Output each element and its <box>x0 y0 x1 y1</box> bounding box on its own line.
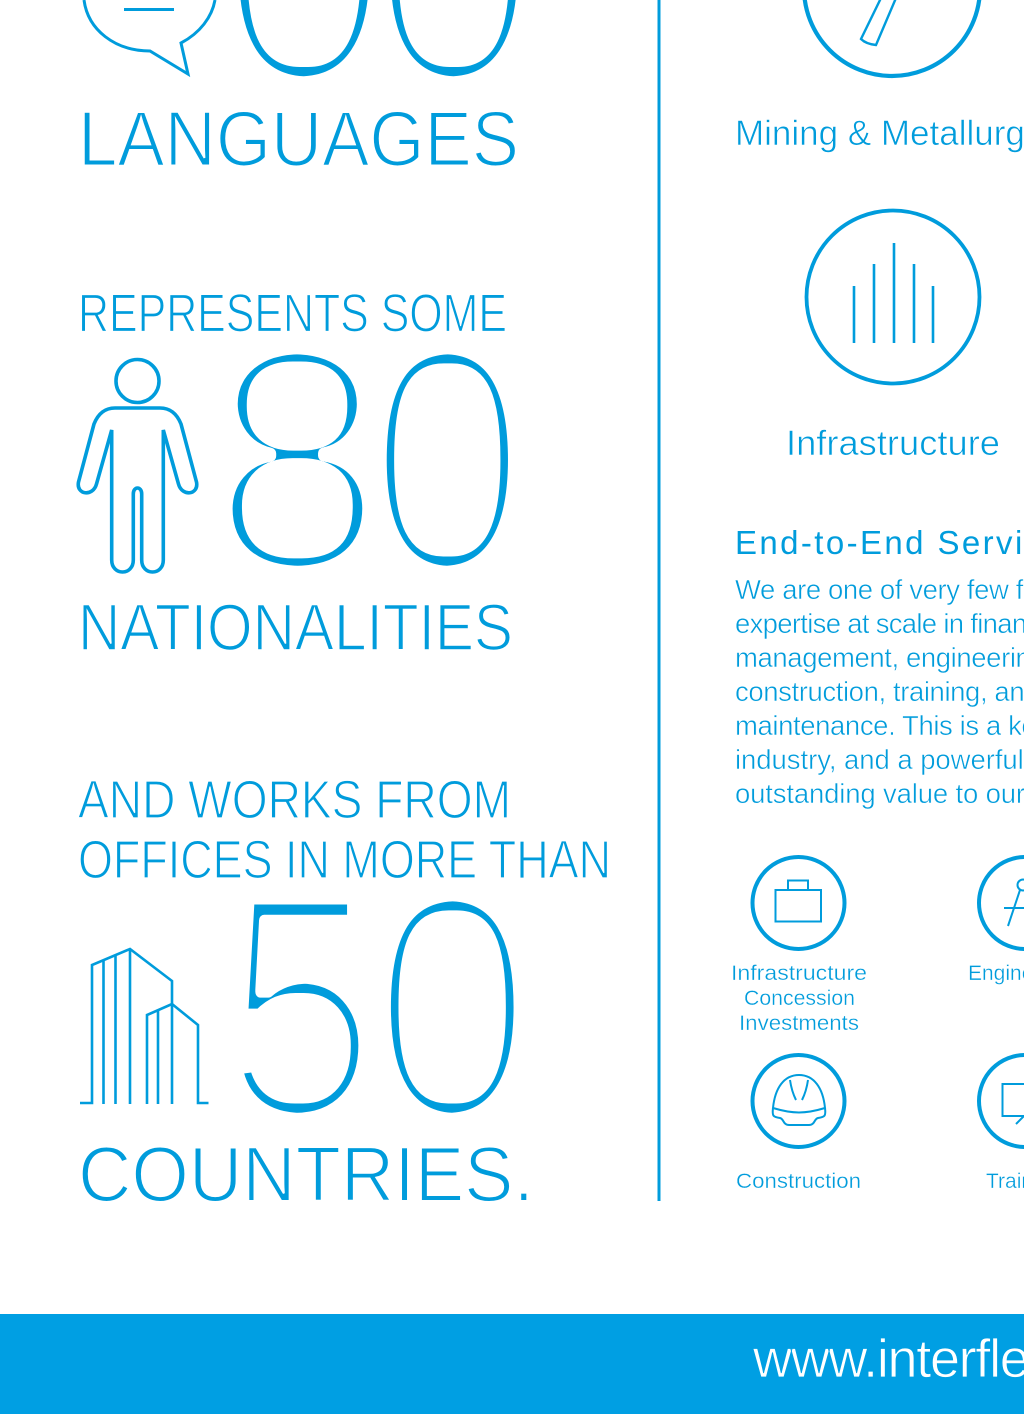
large number: 80 nationalities: 0 <box>366 281 529 637</box>
column divider <box>658 0 660 1201</box>
large number: 80 nationalities <box>209 281 529 638</box>
icon: speech bubble <box>84 0 215 74</box>
large number: 50 countries: 0 <box>370 830 534 1185</box>
heading: and works from: AND WORKS FROM <box>78 770 511 830</box>
paragraph: industry, and a powerful <box>735 744 1024 775</box>
icon: training board <box>979 1055 1024 1147</box>
service: training <box>979 1055 1024 1193</box>
large number: languages count <box>217 0 539 148</box>
icon: briefcase <box>752 857 844 949</box>
large number: 50 countries: 5 <box>222 829 379 1184</box>
large number: 50 countries <box>222 829 534 1185</box>
service label: Construction <box>736 1170 861 1193</box>
icon: compass <box>979 857 1024 949</box>
icon: mining pick <box>804 0 980 76</box>
service label <box>731 962 867 1035</box>
icon: infrastructure <box>806 210 980 384</box>
paragraph: outstanding value to our <box>735 778 1024 809</box>
heading: nationalities: NATIONALITIES <box>78 590 513 664</box>
service label: Investments <box>739 1012 859 1035</box>
icon: person <box>78 360 197 572</box>
icon: hard hat <box>752 1055 844 1147</box>
paragraph <box>735 574 1024 809</box>
service: engineering <box>968 857 1024 985</box>
heading: countries: COUNTRIES. <box>78 1130 534 1218</box>
service: infrastructure concession investments <box>731 857 867 1035</box>
large number: 80 nationalities: 8 <box>209 282 386 638</box>
service label: Infrastructure <box>731 962 867 985</box>
service label: Concession <box>744 987 855 1010</box>
icon: office buildings <box>80 949 208 1104</box>
service: construction <box>736 1055 861 1193</box>
heading: offices in more than: OFFICES IN MORE THAN <box>78 830 611 890</box>
heading: represents some: REPRESENTS SOME <box>78 284 507 344</box>
label: infrastructure: Infrastructure <box>786 424 1000 463</box>
heading: languages: LANGUAGES <box>78 94 519 182</box>
footer banner <box>0 1314 1024 1414</box>
